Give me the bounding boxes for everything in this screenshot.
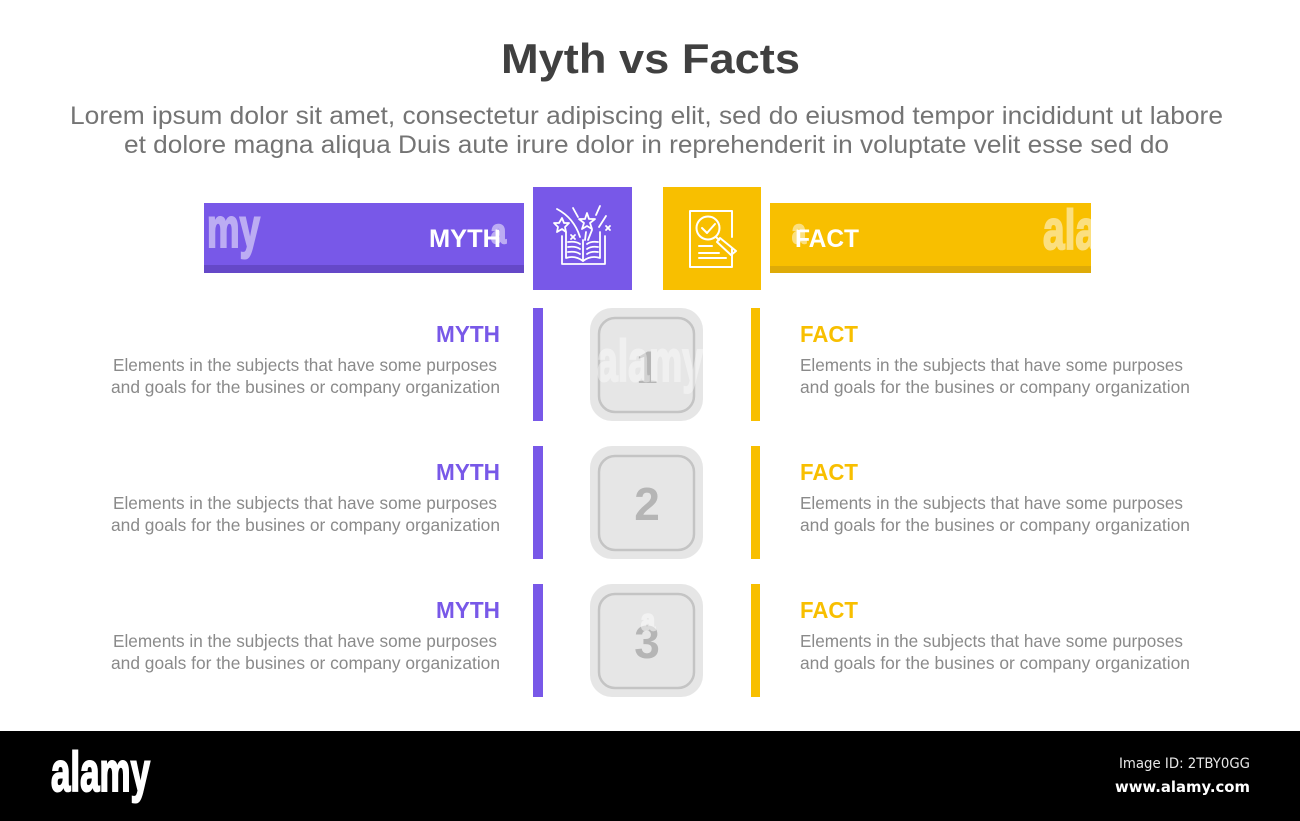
row 3: myth text: and goals for the busines or company organization: [111, 653, 500, 673]
panel: fact header bar: [770, 198, 1098, 273]
row 3: number badge: 3: [634, 616, 660, 668]
row 1: myth text: MYTH: [436, 321, 500, 347]
footer bar: [0, 731, 1300, 821]
footer website: www.alamy.com: [1115, 778, 1250, 796]
row 1: number badge: 1: [635, 341, 659, 394]
row 2: fact divider: [751, 446, 760, 559]
row 2: myth text: and goals for the busines or company organization: [111, 515, 500, 535]
panel: myth header bar: MYTH: [429, 225, 501, 253]
row 2: fact text: and goals for the busines or company organization: [800, 515, 1190, 535]
row 3: fact text: FACT: [800, 597, 858, 623]
row 3: myth text: [111, 597, 500, 673]
panel: fact header bar: a: [792, 213, 807, 251]
row 3: fact text: Elements in the subjects that have some purposes: [800, 631, 1183, 651]
row 1: fact text: [800, 321, 1190, 397]
row 2: fact text: [800, 459, 1190, 535]
icon: document with magnifier: [663, 187, 761, 290]
footer image id: Image ID: 2TBY0GG: [1119, 756, 1250, 772]
row 3: fact divider: [751, 584, 760, 697]
row 3: fact text: [800, 597, 1190, 673]
row 3: fact text: and goals for the busines or company organization: [800, 653, 1190, 673]
icon: open book with stars: [533, 187, 632, 290]
row 3: myth text: Elements in the subjects that have some purposes: [113, 631, 497, 651]
panel: myth header bar: a: [491, 213, 507, 251]
row 2: myth text: [111, 459, 500, 535]
row 1: fact text: and goals for the busines or company organization: [800, 377, 1190, 397]
row 3: number badge: [590, 584, 703, 697]
intro paragraph: Lorem ipsum dolor sit amet, consectetur adipiscing elit, sed do eiusmod tempor incididunt ut labore: [70, 102, 1223, 130]
row 1: myth text: Elements in the subjects that have some purposes: [113, 355, 497, 375]
footer logo: alamy: [51, 740, 150, 803]
row 1: myth text: and goals for the busines or company organization: [111, 377, 500, 397]
panel: fact header bar: FACT: [795, 225, 859, 253]
row 2: myth text: MYTH: [436, 459, 500, 485]
row 2: fact text: Elements in the subjects that have some purposes: [800, 493, 1183, 513]
row 2: number badge: [590, 446, 703, 559]
row 1: fact text: Elements in the subjects that have some purposes: [800, 355, 1183, 375]
intro paragraph: et dolore magna aliqua Duis aute irure dolor in reprehenderit in voluptate velit esse sed do: [124, 131, 1169, 159]
row 1: myth divider: [533, 308, 543, 421]
row 3: number badge: a: [641, 604, 655, 637]
row 1: number badge: alamy: [597, 329, 703, 394]
row 2: myth divider: [533, 446, 543, 559]
intro paragraph: [70, 102, 1223, 159]
row 3: myth text: MYTH: [436, 597, 500, 623]
row 1: myth text: [111, 321, 500, 397]
row 2: fact text: FACT: [800, 459, 858, 485]
panel: myth header bar: my: [207, 196, 260, 259]
title: Myth vs Facts: [501, 35, 800, 82]
row 2: number badge: 2: [634, 478, 660, 530]
row 3: myth divider: [533, 584, 543, 697]
panel: myth header bar: [204, 196, 524, 273]
row 1: fact divider: [751, 308, 760, 421]
panel: fact header bar: ala: [1043, 198, 1098, 261]
row 2: myth text: Elements in the subjects that have some purposes: [113, 493, 497, 513]
row 1: fact text: FACT: [800, 321, 858, 347]
row 1: number badge: [590, 308, 703, 421]
